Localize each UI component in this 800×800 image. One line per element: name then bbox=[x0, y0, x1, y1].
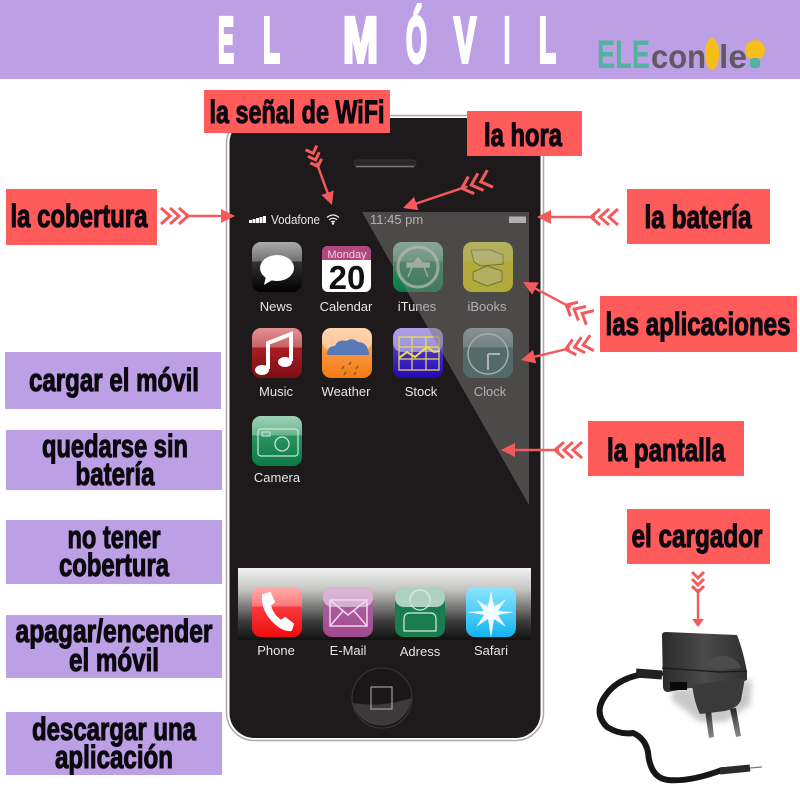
adapter socket bbox=[670, 682, 687, 690]
vocabulary: descargar una aplicación bbox=[6, 711, 222, 775]
label: la batería bbox=[627, 189, 770, 244]
icon: Calendar: Calendar bbox=[320, 299, 373, 314]
label: la pantalla: la pantalla bbox=[607, 432, 725, 468]
vocabulary: apagar/encender el móvil bbox=[6, 613, 222, 678]
icon: Music: Music bbox=[259, 384, 293, 399]
phone bbox=[226, 116, 544, 740]
cable strain relief bbox=[636, 673, 662, 675]
arrow: la cobertura bbox=[161, 208, 235, 224]
label: el cargador: el cargador bbox=[632, 518, 762, 554]
icon: Phone: Phone bbox=[257, 643, 295, 658]
arrow: la hora bbox=[400, 170, 493, 217]
logo: ELEconTIC: le bbox=[719, 38, 747, 75]
adapter shadow bbox=[672, 680, 752, 722]
vocabulary: descargar una aplicación: descargar una bbox=[32, 711, 196, 747]
icon: Weather bbox=[322, 328, 372, 399]
title: V bbox=[454, 4, 476, 76]
arrow: el cargador bbox=[692, 572, 704, 627]
icon: E-Mail: E-Mail bbox=[330, 643, 367, 658]
label: la batería: la batería bbox=[644, 199, 752, 235]
arrow: la pantalla bbox=[501, 442, 582, 458]
icon: Calendar bbox=[320, 246, 373, 314]
app icons bbox=[252, 242, 513, 485]
screen glare bbox=[362, 212, 529, 505]
vocabulary: quedarse sin batería bbox=[6, 428, 222, 492]
vocabulary: no tener cobertura bbox=[6, 519, 222, 584]
logo: ELEconTIC bbox=[597, 33, 765, 77]
vocabulary: quedarse sin batería: batería bbox=[76, 456, 155, 492]
icon: iBooks bbox=[463, 242, 513, 314]
arrow: aplicaciones iBooks bbox=[519, 275, 594, 325]
icon: iTunes bbox=[393, 242, 443, 314]
status bar bbox=[249, 212, 526, 227]
title bbox=[218, 4, 556, 76]
label: la señal de WiFi bbox=[204, 90, 390, 133]
icon: Safari: Safari bbox=[474, 643, 508, 658]
label: la señal de WiFi: la señal de WiFi bbox=[210, 94, 384, 130]
logo: ELEconTIC: con bbox=[651, 38, 706, 75]
vocabulary: cargar el móvil: cargar el móvil bbox=[29, 362, 199, 398]
arrow: WiFi bbox=[305, 145, 338, 207]
charger bbox=[600, 632, 762, 780]
icon: Camera: Camera bbox=[254, 470, 301, 485]
title: E bbox=[218, 4, 234, 76]
icon: E-Mail bbox=[323, 587, 373, 658]
label: el cargador bbox=[627, 509, 770, 564]
header banner bbox=[0, 0, 800, 79]
label: las aplicaciones bbox=[600, 296, 797, 352]
icon: Adress: Adress bbox=[400, 644, 441, 659]
icon: iBooks: iBooks bbox=[467, 299, 507, 314]
icon: iTunes: iTunes bbox=[398, 299, 437, 314]
vocabulary: no tener cobertura: no tener bbox=[68, 519, 160, 555]
icon: Clock: Clock bbox=[474, 384, 507, 399]
title: L bbox=[263, 4, 280, 76]
icon: Calendar: 20 bbox=[329, 259, 365, 296]
label: la cobertura bbox=[6, 189, 157, 245]
status bar: Vodafone bbox=[271, 213, 320, 227]
title: Ó bbox=[406, 4, 427, 76]
label: la hora bbox=[467, 111, 582, 156]
icon: Stock: Stock bbox=[405, 384, 438, 399]
icon: Calendar: Monday bbox=[327, 249, 367, 261]
icon: Clock bbox=[463, 328, 513, 399]
cable tip bbox=[720, 768, 750, 771]
icon: Music bbox=[252, 328, 302, 399]
plug head bbox=[692, 678, 745, 714]
icon: Adress bbox=[395, 587, 445, 659]
vocabulary: descargar una aplicación: aplicación bbox=[55, 739, 173, 775]
status bar: 11:45 pm bbox=[370, 212, 423, 227]
phone body bbox=[226, 116, 544, 740]
header banner: L bbox=[539, 4, 556, 76]
title: M bbox=[343, 4, 378, 76]
vocabulary: no tener cobertura: cobertura bbox=[59, 547, 169, 583]
title: I bbox=[504, 4, 510, 76]
label: la pantalla bbox=[588, 421, 744, 476]
logo: ELEconTIC: ELE bbox=[597, 33, 650, 77]
vocabulary: quedarse sin batería: quedarse sin bbox=[42, 428, 188, 464]
plug pins bbox=[705, 710, 714, 738]
speaker bbox=[354, 160, 416, 167]
vocabulary: apagar/encender el móvil: el móvil bbox=[69, 642, 159, 678]
adapter body bbox=[662, 632, 747, 692]
cable bbox=[600, 674, 722, 780]
icon: News bbox=[252, 242, 302, 314]
label: la hora: la hora bbox=[484, 117, 562, 153]
arrow: la batería bbox=[537, 209, 618, 225]
home button bbox=[352, 668, 412, 728]
dock bbox=[238, 568, 531, 659]
vocabulary: apagar/encender el móvil: apagar/encender bbox=[16, 613, 212, 649]
icon: News: News bbox=[260, 299, 293, 314]
icon: Camera bbox=[252, 416, 302, 485]
icon: Safari bbox=[466, 587, 516, 658]
arrow: aplicaciones Clock bbox=[519, 335, 594, 368]
icon: Weather: Weather bbox=[322, 384, 371, 399]
adapter ridge bbox=[703, 656, 741, 670]
icon: Phone bbox=[252, 587, 302, 658]
vocabulary: cargar el móvil bbox=[5, 352, 221, 409]
icon: Stock bbox=[393, 328, 443, 399]
label: la cobertura: la cobertura bbox=[10, 198, 148, 234]
